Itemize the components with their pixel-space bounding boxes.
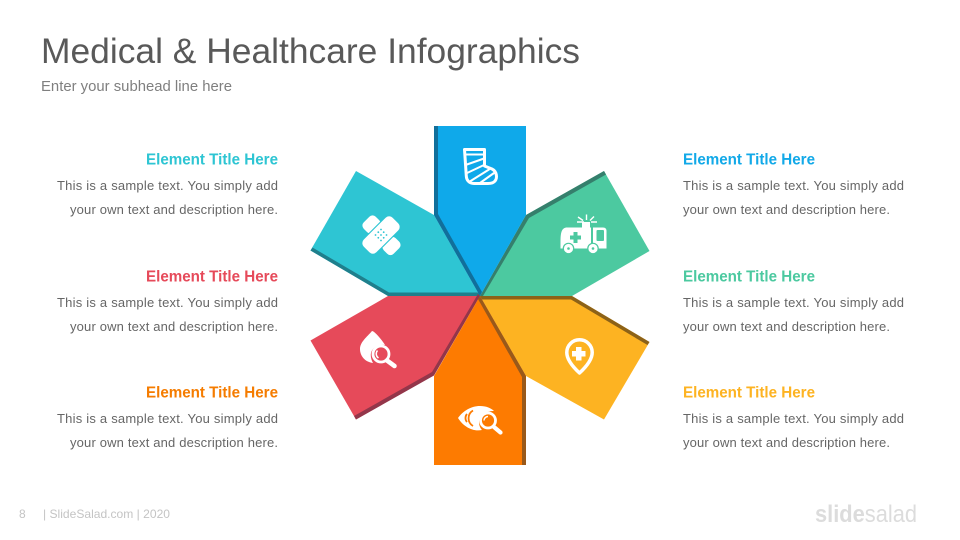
petal: green — [480, 171, 650, 296]
icon: blood drop with magnifier — [360, 331, 394, 366]
left text block 3: your own text and description here. — [70, 435, 278, 450]
right text block 2: This is a sample text. You simply add — [683, 295, 904, 310]
right text block 1: your own text and description here. — [683, 202, 890, 217]
icon: bandage — [359, 213, 403, 257]
logo: slidesalad — [815, 501, 917, 528]
footer text: | SlideSalad.com | 2020 — [43, 507, 170, 521]
left text block 1 — [57, 152, 278, 217]
icon: leg cast — [464, 150, 496, 184]
right text block 1: Element Title Here — [683, 152, 815, 168]
right text block 2: your own text and description here. — [683, 319, 890, 334]
left text block 1: your own text and description here. — [70, 202, 278, 217]
page number: 8 — [19, 507, 26, 521]
petal: orange — [434, 296, 526, 465]
left text block 3: Element Title Here — [146, 384, 278, 402]
petal: blue — [434, 126, 526, 296]
left text block 2: Element Title Here — [146, 268, 278, 286]
right text block 1: This is a sample text. You simply add — [683, 178, 904, 193]
left text block 2 — [57, 268, 278, 334]
left text block 2: your own text and description here. — [70, 319, 278, 334]
petal: red — [310, 294, 480, 420]
icon: location pin with plus — [567, 340, 592, 373]
right text block 3 — [683, 384, 904, 450]
right text block 2 — [683, 268, 904, 334]
right text block 1 — [683, 152, 904, 217]
icon: eye with magnifier — [458, 406, 500, 432]
right text block 2: Element Title Here — [683, 268, 815, 286]
left text block 1: This is a sample text. You simply add — [57, 178, 278, 193]
left text block 1: Element Title Here — [146, 152, 278, 168]
petal: teal — [310, 171, 480, 296]
right text block 3: your own text and description here. — [683, 435, 890, 450]
petal: yellow — [480, 296, 650, 420]
title: Medical & Healthcare Infographics — [41, 32, 580, 71]
left text block 2: This is a sample text. You simply add — [57, 295, 278, 310]
right text block 3: Element Title Here — [683, 384, 815, 402]
right text block 3: This is a sample text. You simply add — [683, 411, 904, 426]
icon: ambulance — [560, 214, 606, 254]
subhead: Enter your subhead line here — [41, 78, 232, 95]
left text block 3: This is a sample text. You simply add — [57, 411, 278, 426]
left text block 3 — [57, 384, 278, 450]
